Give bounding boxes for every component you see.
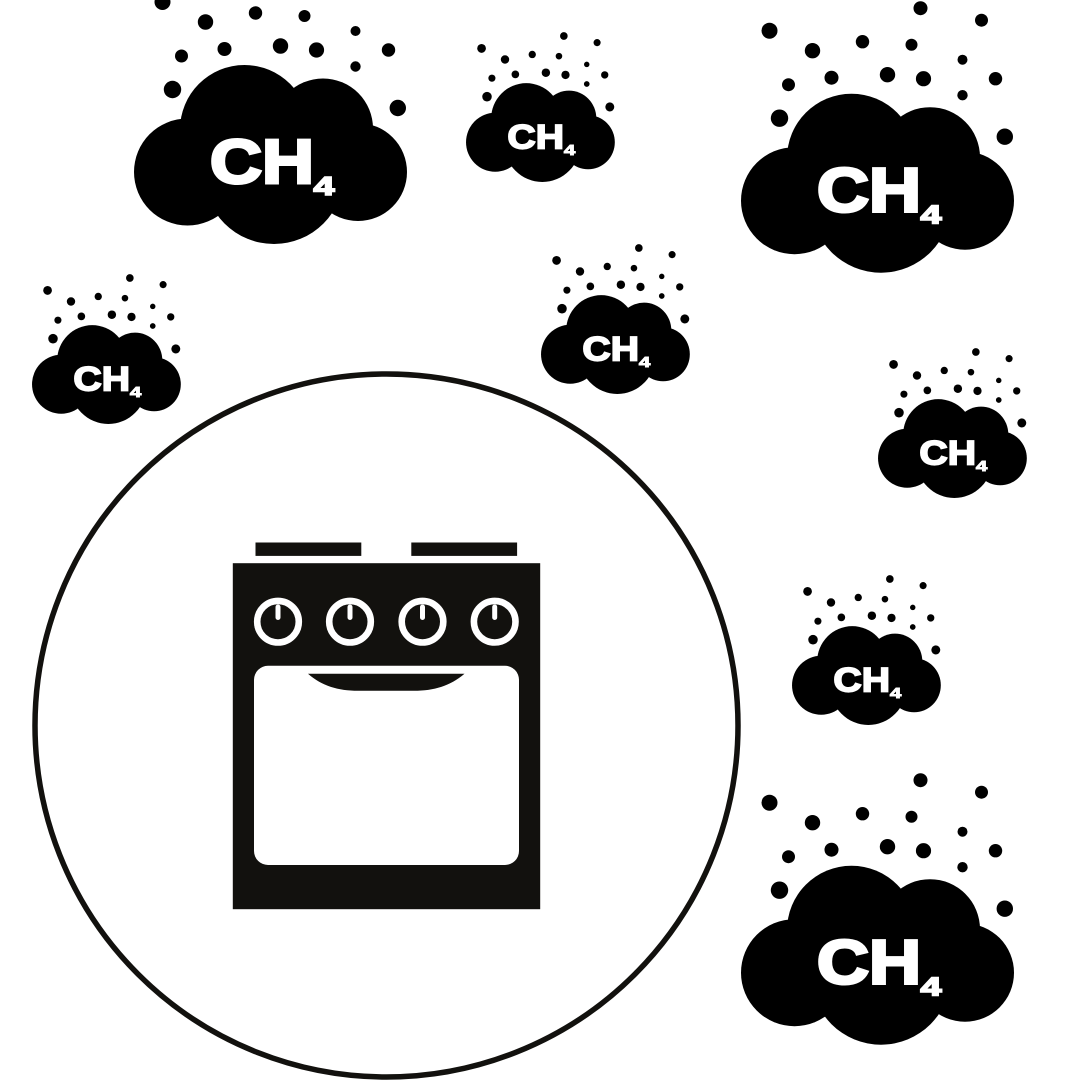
icon: CH4 cloud right middle: CH bbox=[919, 434, 976, 472]
burner left bbox=[256, 542, 361, 556]
icon: CH4 cloud top centre: CH bbox=[507, 118, 564, 156]
knob 2 bbox=[329, 601, 371, 642]
knob 4 bbox=[474, 601, 516, 642]
icon: CH4 cloud top right bbox=[741, 1, 1014, 273]
burner right bbox=[411, 542, 517, 556]
icon: CH4 cloud top centre: 4 bbox=[564, 143, 575, 159]
oven door bbox=[254, 666, 519, 865]
icon: CH4 cloud far left bbox=[32, 274, 181, 424]
icon: stove bbox=[233, 542, 540, 909]
icon: CH4 cloud top left: 4 bbox=[314, 171, 335, 201]
panel: circle outline around stove bbox=[35, 374, 738, 1077]
icon: CH4 cloud right middle bbox=[878, 348, 1027, 498]
icon: CH4 cloud lower right small bbox=[792, 575, 941, 725]
icon: CH4 cloud top left bbox=[134, 0, 407, 244]
icon: CH4 cloud top right: 4 bbox=[920, 200, 942, 230]
icon: CH4 cloud right middle: 4 bbox=[976, 459, 987, 475]
icon: CH4 cloud bottom right: 4 bbox=[920, 972, 942, 1002]
icon: CH4 cloud centre bbox=[541, 244, 690, 394]
icon: CH4 cloud top centre bbox=[466, 32, 615, 182]
icon: CH4 cloud far left: 4 bbox=[130, 385, 141, 401]
icon: CH4 cloud top right: CH bbox=[817, 157, 921, 226]
icon: CH4 cloud centre: 4 bbox=[639, 355, 650, 371]
stove body bbox=[233, 563, 540, 909]
icon: CH4 cloud lower right small: 4 bbox=[890, 686, 901, 702]
knob 1 bbox=[257, 601, 299, 642]
icon: CH4 cloud centre: CH bbox=[582, 330, 639, 368]
oven door handle bbox=[308, 674, 464, 691]
icon: CH4 cloud lower right small: CH bbox=[833, 661, 890, 699]
knob 3 bbox=[402, 601, 443, 642]
icon: CH4 cloud top left: CH bbox=[210, 128, 314, 197]
icon: CH4 cloud bottom right bbox=[741, 773, 1014, 1045]
icon: CH4 cloud far left: CH bbox=[73, 360, 130, 398]
icon: CH4 cloud bottom right: CH bbox=[817, 929, 921, 998]
